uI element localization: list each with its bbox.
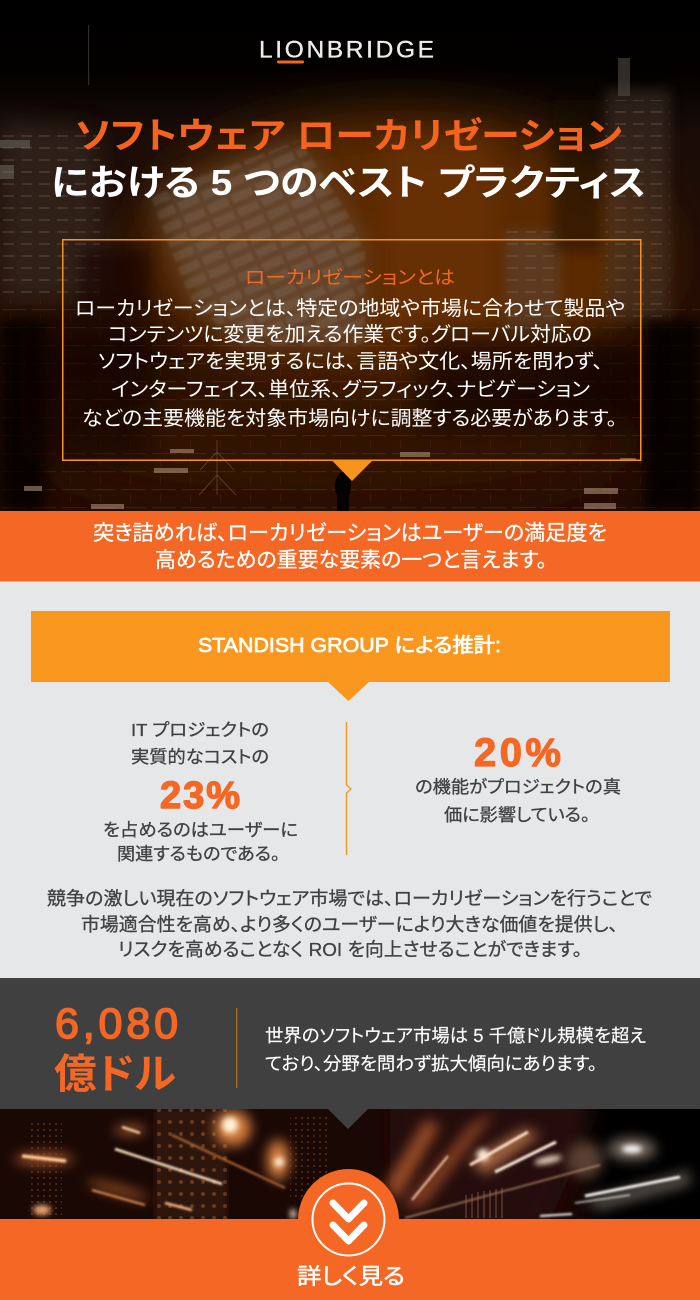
market size description bbox=[265, 1026, 646, 1074]
panel body text: インターフェイス、単位系、グラフィック、ナビゲーション bbox=[111, 378, 590, 401]
heading bar: Standish Group: STANDISH GROUP による推計: bbox=[198, 634, 501, 657]
title: における 5 つのベスト プラクティス bbox=[51, 162, 646, 203]
panel: what is localization bbox=[63, 240, 641, 460]
panel body text: ローカリゼーションとは、特定の地域や市場に合わせて製品や bbox=[75, 297, 625, 320]
footer call to action bbox=[0, 1169, 700, 1300]
icon: double chevron bbox=[312, 1184, 384, 1256]
divider bbox=[346, 722, 351, 855]
button label: 詳しく見る bbox=[297, 1264, 405, 1289]
stat: 608 billion dollars: 億ドル bbox=[54, 1051, 176, 1097]
stat: 608 billion dollars bbox=[54, 1000, 178, 1097]
stat: 23%: 関連するものである。 bbox=[117, 844, 280, 864]
market size description: 世界のソフトウェア市場は 5 千億ドル規模を超え bbox=[265, 1026, 646, 1046]
orange banner: 突き詰めれば、ローカリゼーションはユーザーの満足度を bbox=[93, 522, 607, 545]
stat: 23%: 実質的なコストの bbox=[131, 747, 269, 767]
market size description: ており、分野を問わず拡大傾向にあります。 bbox=[265, 1054, 597, 1074]
panel: market size bbox=[0, 978, 700, 1109]
logo: Lionbridge: LIONBRIDGE bbox=[259, 36, 434, 64]
panel body text: コンテンツに変更を加える作業です。グローバル対応の bbox=[108, 323, 592, 346]
stat: 23%: 23% bbox=[160, 775, 240, 817]
hero background: city at night bbox=[0, 0, 700, 511]
orange banner: 高めるための重要な要素の一つと言えます。 bbox=[155, 549, 547, 572]
orange banner bbox=[0, 511, 700, 582]
text block: market summary: 市場適合性を高め、より多くのユーザーにより大きな価値を提供し、 bbox=[81, 914, 618, 935]
title: ソフトウェア ローカリゼーション bbox=[75, 115, 622, 156]
arrow: panel pointer bbox=[332, 461, 372, 481]
arrow: dark pointer bbox=[328, 1109, 368, 1129]
stat: 20%: 価に影響している。 bbox=[444, 805, 590, 825]
panel body text: などの主要機能を対象市場向けに調整する必要があります。 bbox=[82, 407, 617, 430]
panel body text bbox=[75, 297, 625, 430]
stat: 23%: IT プロジェクトの bbox=[131, 720, 269, 740]
bottom image: light streaks bbox=[0, 1109, 696, 1219]
panel heading: ローカリゼーションとは bbox=[245, 267, 455, 288]
stat: 23%: を占めるのはユーザーに bbox=[103, 820, 298, 840]
panel: grey statistics section bbox=[0, 582, 700, 978]
stat: 20%: 20% bbox=[474, 731, 561, 775]
stat: 23% bbox=[103, 720, 298, 864]
stat: 608 billion dollars: 6,080 bbox=[55, 1000, 178, 1048]
panel body text: ソフトウェアを実現するには、言語や文化、場所を問わず、 bbox=[98, 350, 603, 373]
stat: 20%: の機能がプロジェクトの真 bbox=[415, 777, 621, 797]
text block: market summary: リスクを高めることなく ROI を向上させることができます。 bbox=[118, 939, 582, 960]
stat: 20% bbox=[415, 731, 621, 825]
title bbox=[51, 115, 646, 203]
text block: market summary bbox=[47, 888, 652, 960]
text block: market summary: 競争の激しい現在のソフトウェア市場では、ローカリゼーションを行うことで bbox=[47, 888, 652, 909]
heading bar: Standish Group bbox=[31, 611, 670, 701]
